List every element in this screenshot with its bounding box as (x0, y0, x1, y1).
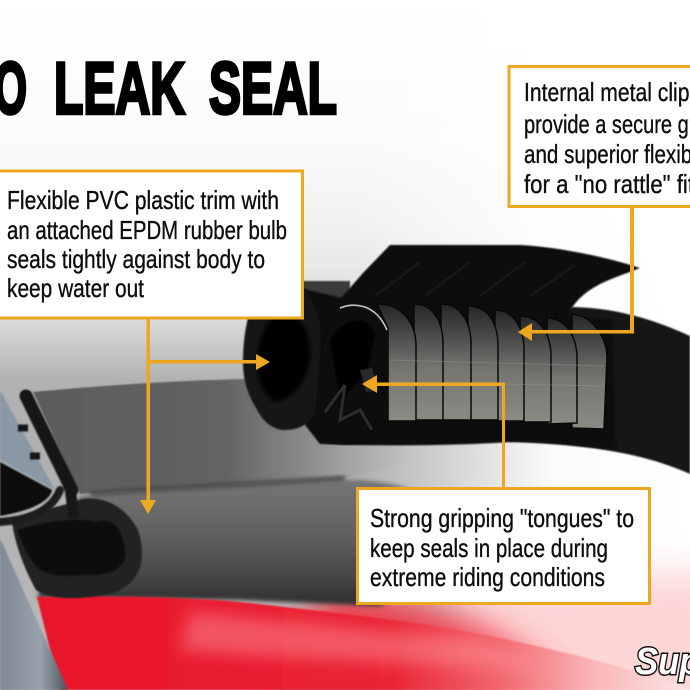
main seal cross-section (243, 245, 690, 474)
callout: flexible PVC trim: keep water out (7, 273, 145, 303)
flap ribs (375, 262, 575, 296)
upper flap (335, 245, 640, 325)
tube neck behind bulb (293, 281, 350, 305)
metal clips (377, 304, 607, 429)
callout: gripping tongues (358, 488, 650, 604)
connector: tongues arrow (362, 375, 505, 488)
callout: flexible PVC trim: seals tightly against body to (7, 244, 265, 274)
callout: gripping tongues: extreme riding conditions (370, 562, 605, 592)
cut end of lower seal (12, 498, 142, 598)
black seal clip lip (0, 396, 74, 522)
callout: gripping tongues: keep seals in place during (370, 533, 608, 563)
grey blade bottom left (0, 538, 68, 690)
bulb to channel filler (300, 288, 616, 450)
clip seams (390, 360, 604, 386)
title: SEAL (209, 48, 337, 130)
red vehicle body panel (37, 596, 690, 690)
callout: flexible PVC trim: Flexible PVC plastic trim with (7, 185, 279, 215)
blurred lower rubber tube (37, 478, 433, 606)
title: LEAK (54, 48, 185, 130)
title (0, 48, 337, 130)
connector: PVC trim arrows (140, 318, 270, 514)
clip channel opening (318, 305, 388, 445)
rubber bulb (243, 282, 321, 430)
connector: metal clips arrow (518, 207, 634, 341)
grey blade left (0, 390, 55, 490)
callout: gripping tongues: Strong gripping "tongues" to (370, 503, 634, 533)
callout: flexible PVC trim: an attached EPDM rubber bulb (7, 215, 287, 245)
callout: flexible PVC trim (0, 171, 302, 318)
right body of seal (430, 307, 690, 474)
callout: internal metal clips (509, 66, 690, 206)
bulb opening (257, 312, 310, 402)
blurred upper rubber tube (33, 378, 420, 494)
